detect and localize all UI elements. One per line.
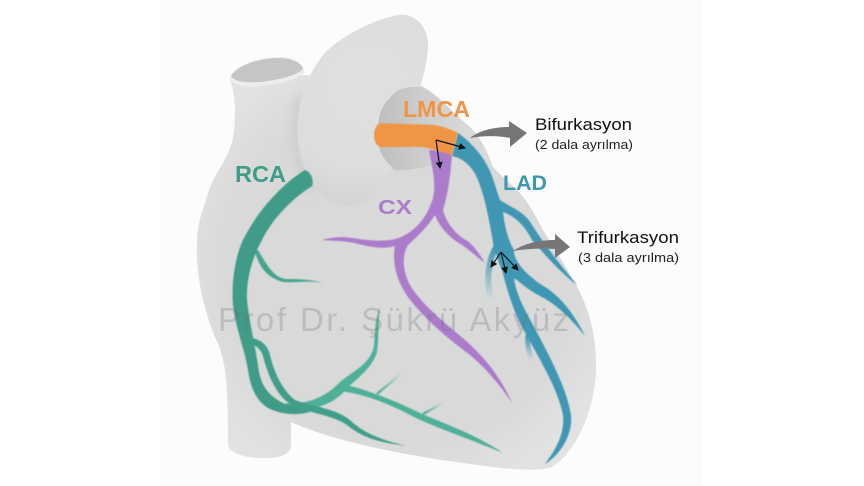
arrow: to bifurcation label [470,121,527,147]
RCA marginal branch [255,250,323,283]
inner hollow of the aortic arch [377,87,465,170]
heart illustration [197,15,596,470]
label: LMCA: LMCA [403,96,470,122]
right coronary artery [233,170,503,453]
label: RCA: RCA [235,161,286,187]
left main coronary artery [374,123,458,155]
black arrows: trifurcation branches [491,252,518,273]
label: CX: CX [378,197,413,219]
RCA main trunk [233,170,313,414]
callout: bifurcation [535,115,633,152]
background panel [160,0,702,486]
black arrows: bifurcation branches [436,140,465,168]
trifurcation note: (3 dala ayrılma) [578,250,679,265]
LAD faded diagonal lower [528,335,532,360]
watermark: Prof Dr. Şükrü Akyüz [218,301,569,338]
RCA posterior branch [252,338,407,446]
callout: trifurcation [577,228,679,265]
label: LAD: LAD [503,172,547,195]
shadow beside the arch [297,95,312,190]
RCA lower branch to the apex [340,384,503,453]
vena cava opening [229,57,305,87]
aortic arch [298,15,428,206]
bifurcation note: (2 dala ayrılma) [535,137,633,152]
LAD faded diagonal left [488,246,497,300]
RCA ascending branch [285,307,380,409]
left anterior descending artery [452,133,585,464]
heart body with great vessels [197,75,596,470]
bifurcation title: Bifurkasyon [535,115,632,134]
RCA twig one [377,373,402,394]
LAD trunk and branches [452,133,585,464]
trifurcation title: Trifurkasyon [577,228,679,247]
circumflex artery [322,150,512,403]
arrow: to trifurcation label [513,234,570,258]
RCA twig two [423,403,443,414]
